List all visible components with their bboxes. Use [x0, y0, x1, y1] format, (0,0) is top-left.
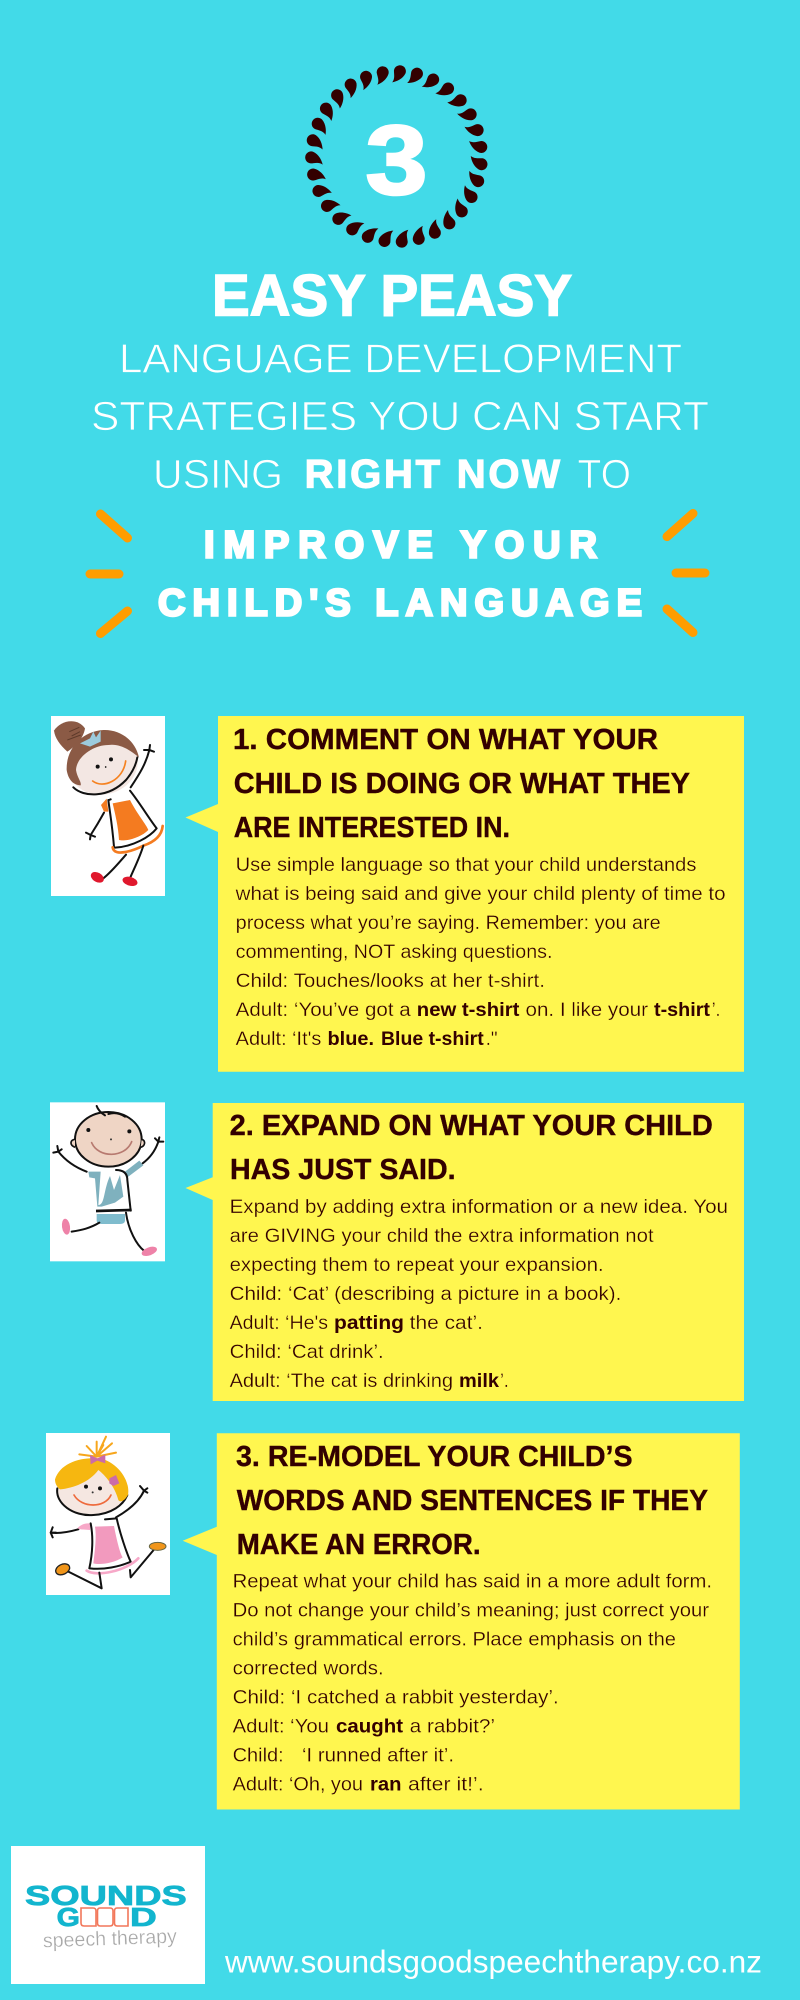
body text: strategy 1: ’. — [712, 999, 720, 1021]
subtitle line 1: LANGUAGE DEVELOPMENT — [119, 336, 682, 382]
panel: strategy 1 — [51, 716, 744, 1072]
subtitle line 3: RIGHT NOW — [305, 452, 560, 496]
logo: sounds good speech therapy: SOUNDS — [25, 1880, 187, 1911]
body text: strategy 3: a rabbit?’ — [410, 1716, 495, 1738]
body text: strategy 1: t-shirt — [654, 999, 711, 1021]
body text: strategy 1: process what you’re saying. Remember: you are — [236, 912, 661, 934]
panel: strategy 2 — [50, 1102, 744, 1401]
body text: strategy 1: what is being said and give your child plenty of time to — [235, 883, 726, 905]
heading: strategy 1: CHILD IS DOING OR WHAT THEY — [234, 768, 690, 800]
body text: strategy 2: Expand by adding extra information or a new idea. You — [230, 1196, 728, 1218]
body text: strategy 3: after it!’. — [408, 1774, 484, 1796]
speech card: strategy 2 — [186, 1103, 744, 1401]
heading: strategy 1: ARE INTERESTED IN. — [234, 812, 510, 844]
heading: child's language: CHILD'S LANGUAGE — [158, 582, 642, 624]
speech card: strategy 1 — [186, 716, 744, 1072]
ring of drops — [305, 65, 488, 248]
body text: strategy 1: Use simple language so that your child understands — [236, 854, 697, 876]
heading: strategy 1 — [233, 724, 690, 844]
body text: strategy 3: Adult: ‘Oh, you — [233, 1774, 363, 1796]
accent: orange burst lines — [90, 514, 705, 634]
heading: strategy 2: HAS JUST SAID. — [230, 1154, 456, 1186]
body text: strategy 3: Adult: ‘You — [233, 1716, 329, 1738]
speech card: strategy 3 — [183, 1433, 740, 1810]
body text: strategy 1: Child: Touches/looks at her t-shirt. — [236, 970, 545, 992]
subtitle line 3: USING — [153, 451, 283, 497]
heading: easy peasy: EASY PEASY — [212, 264, 572, 328]
heading: strategy 1: 1. COMMENT ON WHAT YOUR — [233, 724, 658, 756]
heading: strategy 3: WORDS AND SENTENCES IF THEY — [237, 1485, 708, 1517]
subtitle line 3: TO — [578, 451, 631, 497]
body text: strategy 2: milk — [459, 1370, 499, 1392]
body text: strategy 1 — [235, 854, 726, 1050]
body text: strategy 2: expecting them to repeat your expansion. — [230, 1254, 604, 1276]
illustration: boy in blue shirt — [50, 1102, 165, 1261]
panel: strategy 3 — [46, 1433, 740, 1810]
logo: sounds good speech therapy — [11, 1846, 205, 1984]
body text: strategy 1: ." — [486, 1028, 498, 1050]
logo: sounds good speech therapy: speech therapy — [43, 1926, 177, 1952]
subtitle line 2: STRATEGIES YOU CAN START — [91, 393, 709, 439]
body text: strategy 1: new t-shirt — [417, 999, 520, 1021]
body text: strategy 2: patting — [334, 1312, 404, 1334]
body text: strategy 2: the cat’. — [410, 1312, 483, 1334]
body text: strategy 1: blue. — [328, 1028, 374, 1050]
heading: strategy 2 — [230, 1110, 713, 1186]
body text: strategy 3: Child: — [233, 1744, 284, 1766]
heading: strategy 3: 3. RE-MODEL YOUR CHILD’S — [236, 1441, 633, 1473]
body text: strategy 2: Child: ‘Cat’ (describing a picture in a book). — [230, 1283, 621, 1305]
logo: sounds good speech therapy: G — [57, 1902, 80, 1932]
body text: strategy 1: Blue t-shirt — [381, 1028, 484, 1050]
body text: strategy 1: commenting, NOT asking questions. — [236, 941, 552, 963]
subtitle line 3 — [153, 451, 631, 497]
body text: strategy 3: caught — [336, 1716, 404, 1738]
illustration: girl in orange dress — [51, 716, 165, 896]
body text: strategy 3: Repeat what your child has said in a more adult form. — [233, 1570, 712, 1592]
body text: strategy 1: on. I like your — [526, 999, 649, 1021]
body text: strategy 3: Do not change your child’s meaning; just correct your — [233, 1600, 710, 1622]
heading: strategy 3 — [236, 1441, 708, 1561]
body text: strategy 2: Child: ‘Cat drink’. — [230, 1341, 384, 1363]
body text: strategy 2 — [230, 1196, 728, 1392]
body text: strategy 2: Adult: ‘The cat is drinking — [230, 1370, 453, 1392]
body text: strategy 3: child’s grammatical errors. Place emphasis on the — [233, 1628, 676, 1650]
body text: strategy 2: ’. — [500, 1370, 509, 1392]
body text: strategy 3: ran — [370, 1774, 402, 1796]
heading: improve your: IMPROVE YOUR — [204, 524, 597, 566]
heading: strategy 2: 2. EXPAND ON WHAT YOUR CHILD — [230, 1110, 713, 1142]
body text: strategy 2: Adult: ‘He's — [230, 1312, 328, 1334]
badge: number 3 in ring of drops — [305, 65, 488, 248]
logo: sounds good speech therapy: D — [130, 1902, 157, 1932]
body text: strategy 1: Adult: ‘It's — [236, 1028, 322, 1050]
body text: strategy 3: corrected words. — [233, 1658, 384, 1680]
number 3: 3 — [366, 105, 428, 215]
heading: strategy 3: MAKE AN ERROR. — [237, 1529, 481, 1561]
title block — [91, 264, 709, 624]
body text: strategy 3 — [233, 1570, 712, 1796]
illustration: girl in pink dress — [46, 1433, 170, 1595]
body text: strategy 3: Child: ‘I catched a rabbit yesterday’. — [233, 1686, 559, 1708]
body text: strategy 2: are GIVING your child the extra information not — [230, 1225, 654, 1247]
body text: strategy 1: Adult: ‘You’ve got a — [236, 999, 411, 1021]
body text: strategy 3: ‘I runned after it’. — [302, 1744, 454, 1766]
website url: www.soundsgoodspeechtherapy.co.nz — [224, 1944, 762, 1980]
